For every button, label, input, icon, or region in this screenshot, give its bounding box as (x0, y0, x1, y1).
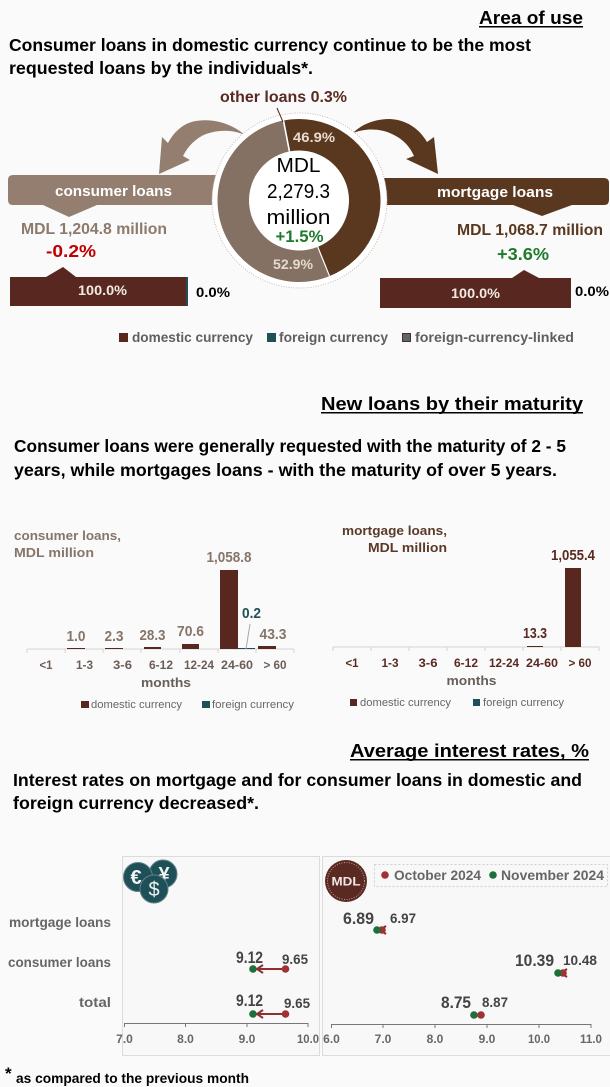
slice: mortgage loans (283, 119, 381, 276)
chart title: MDL million (14, 545, 94, 560)
value: mortgage loans amount: MDL 1,068.7 million (457, 222, 603, 239)
axis labels: > 60 (568, 656, 592, 670)
chart title: mortgage loans, (342, 523, 447, 538)
bar chart: mortgage loans maturity (333, 523, 599, 709)
legend: currency types: foreign-currency-linked (415, 330, 574, 345)
chart legend: domestic currency (91, 699, 182, 711)
icon: currency coins: € (130, 867, 142, 889)
icon: MDL coin (325, 860, 367, 902)
label: other loans: other loans 0.3% (220, 89, 347, 106)
chart legend: foreign currency (212, 699, 295, 711)
axis labels: months (446, 673, 496, 688)
value: consumer loans amount (21, 221, 167, 261)
icon: currency coins (124, 860, 177, 903)
legend: months: November 2024 (501, 868, 605, 883)
category labels (8, 915, 111, 1010)
bar: consumer loans by currency (10, 267, 231, 306)
axis labels: 12-24 (184, 658, 214, 672)
axis labels: 7.0 (116, 1032, 133, 1046)
arrow: to mortgage loans (353, 119, 438, 174)
icon: currency coins: $ (148, 879, 160, 901)
dumbbell: total (236, 991, 310, 1018)
text block: rates summary (13, 770, 582, 813)
axis labels: 3-6 (113, 658, 132, 672)
dumbbell: consumer loans (515, 951, 597, 977)
axis labels (40, 658, 287, 690)
axis labels: 6.0 (323, 1032, 340, 1046)
value: mortgage loans amount (457, 222, 603, 264)
chart title (342, 523, 447, 555)
dumbbell: consumer loans (236, 948, 308, 973)
bar chart: consumer loans maturity (14, 528, 295, 711)
axis labels: 6-12 (149, 658, 173, 672)
dumbbell: consumer loans: 10.39 (515, 951, 554, 970)
value labels: 1.0 (66, 629, 86, 645)
text block: area summary (9, 35, 531, 78)
dumbbell: mortgage loans: 6.97 (390, 910, 416, 926)
dumbbell: total: 8.87 (482, 994, 508, 1010)
dumbbell: mortgage loans: 6.89 (343, 909, 374, 928)
footnote: * (5, 1064, 12, 1083)
donut centre total (266, 155, 330, 246)
donut chart: loan structure (212, 108, 387, 288)
text block: rates summary: foreign currency decreased*. (13, 793, 259, 813)
bar: mortgage loans by currency (380, 270, 610, 308)
chart legend: domestic currency (360, 697, 451, 709)
donut chart: loan structure: 52.9% (273, 256, 314, 272)
section: average interest rates (5, 741, 610, 1086)
chart title: consumer loans, (14, 528, 121, 543)
value labels (523, 548, 595, 642)
bar: consumer loans by currency: 0.0% (196, 284, 231, 300)
axis labels: 10.0 (528, 1032, 550, 1046)
legend: currency types (119, 330, 574, 345)
banner: consumer loans: consumer loans (55, 183, 172, 200)
legend: months (374, 864, 608, 886)
value labels (66, 550, 286, 645)
icon: currency coins: ¥ (158, 864, 170, 886)
axis labels: 24-60 (221, 658, 253, 672)
legend: months: October 2024 (394, 868, 481, 883)
donut chart: loan structure: 46.9% (293, 129, 336, 145)
value: consumer loans amount: MDL 1,204.8 million (21, 221, 167, 238)
footnote: as compared to the previous month (16, 1071, 249, 1086)
donut centre total: +1.5% (276, 227, 324, 246)
heading: Average interest rates: Average interest rates, % (350, 741, 589, 761)
heading: New loans by their maturity: New loans by their maturity (321, 394, 583, 414)
dumbbell: total (441, 993, 508, 1019)
axis labels: 3-6 (418, 656, 438, 670)
axis labels: 11.0 (580, 1032, 602, 1046)
chart legend: foreign currency (483, 697, 565, 709)
text block: maturity summary (14, 436, 566, 480)
icon: MDL coin: MDL (332, 874, 360, 888)
value labels: 1,058.8 (206, 550, 252, 566)
axis labels: 7.0 (375, 1032, 392, 1046)
value labels: 1,055.4 (551, 548, 595, 564)
axis labels: 1-3 (76, 658, 93, 672)
dumbbell: total: 9.12 (236, 991, 263, 1010)
chart legend (81, 699, 295, 711)
footnote (5, 1064, 249, 1086)
axis labels: 12-24 (489, 656, 519, 670)
banner: mortgage loans: mortgage loans (437, 184, 553, 201)
chart title: MDL million (368, 540, 447, 555)
axis labels: <1 (40, 658, 53, 672)
value labels: 2.3 (104, 629, 124, 645)
dumbbell: total: 9.65 (284, 995, 310, 1011)
heading: Area of use: Area of use (479, 8, 583, 28)
axis labels: 9.0 (239, 1032, 256, 1046)
category labels: mortgage loans (9, 915, 111, 930)
bar: mortgage loans by currency: 100.0% (451, 285, 501, 301)
donut centre total: million (266, 207, 330, 229)
axis labels (346, 656, 592, 688)
text block: rates summary: Interest rates on mortgage and for consumer loans in domestic and (13, 770, 582, 790)
bar: consumer loans by currency: 100.0% (78, 282, 128, 298)
value labels: 13.3 (523, 626, 547, 642)
value labels: 0.2 (242, 606, 261, 622)
axis labels: 1-3 (382, 656, 399, 670)
banner: mortgage loans (375, 178, 609, 216)
axis labels: <1 (346, 656, 359, 670)
dumbbell: total: 8.75 (441, 993, 471, 1012)
value labels: 43.3 (260, 627, 286, 643)
leader line: other loans (277, 108, 283, 122)
arrow: to consumer loans (159, 120, 245, 174)
section: area of use (8, 8, 610, 345)
panel: foreign currency rates (116, 856, 320, 1056)
value: mortgage loans amount: +3.6% (497, 244, 549, 264)
text block: maturity summary: years, while mortgages loans - with the maturity of over 5 years. (14, 460, 557, 480)
dumbbell: mortgage loans (343, 909, 416, 934)
donut centre total: 2,279.3 (267, 181, 330, 203)
section: new loans by maturity (14, 394, 599, 711)
bars (67, 570, 276, 649)
panel: MDL rates (322, 856, 610, 1056)
axis labels: 24-60 (526, 656, 558, 670)
axis labels: 6-12 (454, 656, 478, 670)
banner: consumer loans (8, 175, 225, 217)
axis labels: 10.0 (297, 1032, 319, 1046)
axis labels: 9.0 (479, 1032, 496, 1046)
dumbbell: consumer loans: 9.12 (236, 948, 263, 967)
legend: currency types: domestic currency (132, 330, 253, 345)
chart title (14, 528, 121, 560)
value labels: 70.6 (177, 624, 204, 640)
axis labels (323, 1032, 602, 1046)
donut centre total: MDL (276, 155, 320, 177)
bars (527, 568, 581, 647)
axis labels: 8.0 (427, 1032, 444, 1046)
bar: mortgage loans by currency: 0.0% (575, 283, 610, 299)
dumbbell: consumer loans: 9.65 (282, 951, 308, 967)
text block: maturity summary: Consumer loans were generally requested with the maturity of 2 - 5 (14, 436, 566, 456)
axis labels: > 60 (264, 658, 287, 672)
text block: area summary: Consumer loans in domestic currency continue to be the most (9, 35, 531, 55)
chart legend (350, 697, 565, 709)
axis labels: 8.0 (177, 1032, 194, 1046)
category labels: consumer loans (8, 955, 111, 970)
axis labels (116, 1032, 319, 1046)
slice: consumer loans (218, 120, 330, 282)
value labels: 28.3 (140, 628, 166, 644)
text block: area summary: requested loans by the individuals*. (9, 58, 313, 78)
value: consumer loans amount: -0.2% (46, 241, 96, 261)
legend: currency types: foreign currency (279, 330, 389, 345)
dumbbell: consumer loans: 10.48 (563, 952, 597, 968)
axis labels: months (141, 675, 191, 690)
category labels: total (79, 995, 111, 1010)
